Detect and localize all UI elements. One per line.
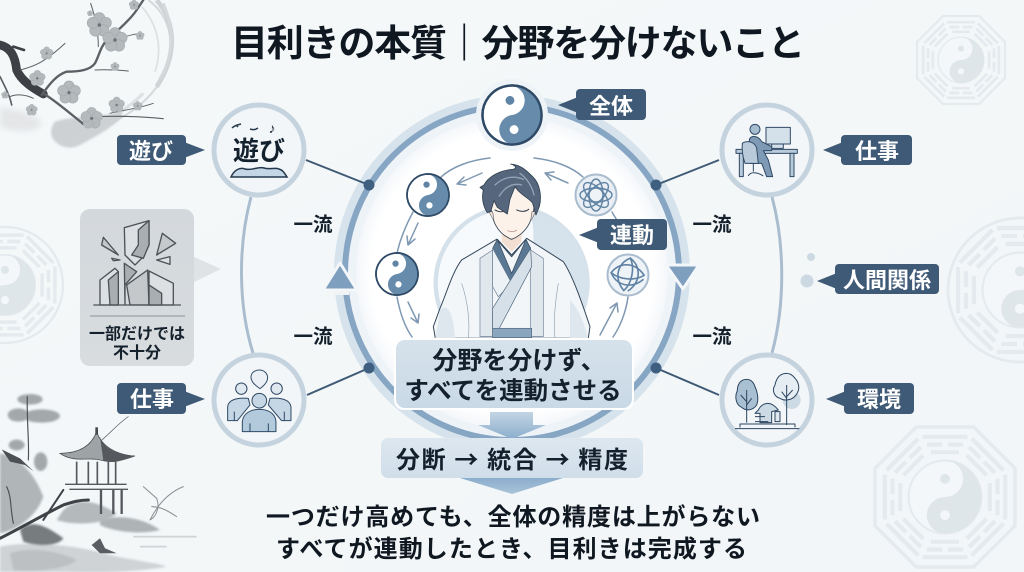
node: 遊び: 遊び <box>233 136 285 166</box>
decoration: plum branch with ink ring <box>0 0 172 148</box>
label: 人間関係: 人間関係 <box>843 268 931 293</box>
decoration: bagua left <box>0 227 63 343</box>
label: 全体 <box>558 89 646 120</box>
neck and face <box>487 187 537 255</box>
node: 仕事 people <box>214 355 304 445</box>
hair <box>480 164 540 215</box>
callout: partial is not enough: 一部だけでは <box>89 325 185 343</box>
flow labels: 一流 <box>293 214 333 236</box>
inner icon: flower knot <box>576 174 616 216</box>
flow labels: 一流 <box>293 326 333 348</box>
decoration: pavilion landscape <box>0 394 197 572</box>
icon: broken pillars <box>93 221 181 305</box>
callout: partial is not enough <box>80 209 221 366</box>
inner cycle arcs and arrows <box>397 158 628 337</box>
label: 全体: 全体 <box>589 94 633 119</box>
conclusion text: 一つだけ高めても、全体の精度は上がらない <box>266 503 760 531</box>
arrow: down to process <box>478 412 546 439</box>
label: 環境 <box>826 383 914 414</box>
dots: 人間関係 <box>800 253 815 288</box>
flow labels: 一流 <box>692 214 732 236</box>
ring arrow left <box>323 263 357 295</box>
label: 仕事 left: 仕事 <box>130 387 174 412</box>
arrow: down to conclusion <box>460 478 563 494</box>
label: 遊び <box>117 135 205 165</box>
ring arrow right <box>666 265 699 289</box>
connector arcs and lines <box>241 160 782 395</box>
panel: main message: すべてを連動させる <box>404 377 622 405</box>
panel: main message: 分野を分けず、 <box>432 347 606 375</box>
pavilion <box>60 432 135 462</box>
label: 仕事 left <box>117 383 205 414</box>
ring outer band <box>339 100 685 446</box>
inner yin-yang left upper <box>404 171 452 219</box>
node: 遊び: ♪ <box>268 120 276 136</box>
title: 目利きの本質｜分野を分けないこと <box>231 23 805 64</box>
node: 仕事 desk <box>722 105 812 195</box>
robe <box>433 238 590 338</box>
ring main stroke <box>345 106 679 440</box>
conclusion text: すべてが連動したとき、目利きは完成する <box>276 535 747 563</box>
panel: process: 分断 → 統合 → 精度 <box>396 440 628 475</box>
node: 遊び <box>214 105 304 195</box>
label: 環境: 環境 <box>857 387 901 412</box>
conclusion text <box>266 503 760 563</box>
label: 仕事 right <box>823 135 912 165</box>
central ring <box>323 100 699 446</box>
flow labels: 一流 <box>692 326 732 348</box>
inner icon: woven knot <box>608 254 648 296</box>
label: 遊び: 遊び <box>129 139 173 164</box>
callout: partial is not enough: 不十分 <box>113 344 161 362</box>
label: 仕事 right: 仕事 <box>855 139 899 164</box>
ring node dots <box>364 180 662 374</box>
label: 人間関係 <box>817 264 939 294</box>
person figure <box>433 164 590 359</box>
label: 連動 <box>579 219 667 250</box>
node: whole yin-yang <box>476 79 548 151</box>
flow labels <box>293 214 732 348</box>
node: 環境 <box>722 355 812 445</box>
label: 連動: 連動 <box>610 223 654 248</box>
panel: main message <box>394 338 634 410</box>
ring inner white disc <box>356 117 668 429</box>
inner yin-yang left lower <box>373 250 421 298</box>
decoration: bagua right <box>948 218 1024 362</box>
decoration: bagua top right <box>917 16 1005 104</box>
halo <box>436 207 589 359</box>
decoration: bagua bottom right <box>875 427 1015 567</box>
